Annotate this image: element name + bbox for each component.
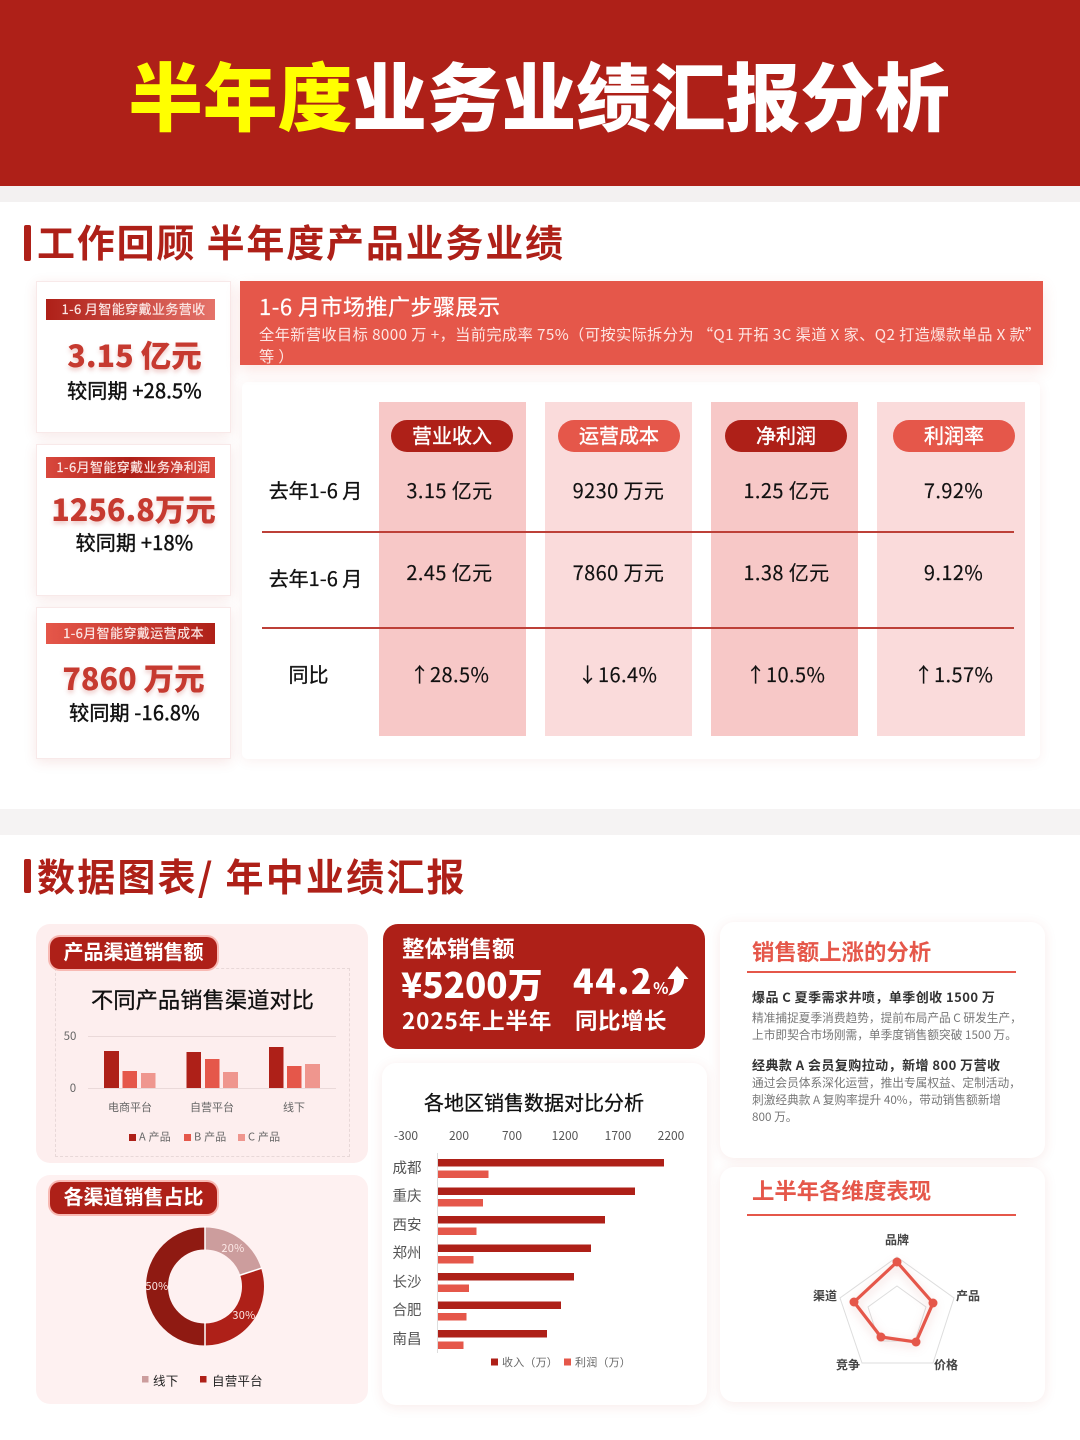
- section heading: 数据图表: [24, 847, 467, 902]
- value: ↓16.4%: [578, 659, 657, 688]
- horizontal bar chart: 西安: [392, 1214, 422, 1235]
- analysis text 2: 通过会员体系深化运营，推出专属权益、定制活动，: [752, 1074, 1021, 1091]
- value: 2.45 亿元: [406, 557, 493, 586]
- grouped bar chart: [64, 1028, 336, 1144]
- panel: comparison table: [242, 382, 1040, 759]
- analysis point 1: 爆品 C 夏季需求井喷，单季创收 1500 万: [752, 987, 995, 1006]
- grouped bar chart: B 产品: [194, 1128, 226, 1144]
- grouped bar chart: 自营平台: [190, 1099, 234, 1115]
- radar chart: [813, 1231, 980, 1373]
- radar chart: 价格: [934, 1356, 958, 1373]
- value: 7860 万元: [573, 557, 664, 586]
- horizontal bar chart: 收入（万）: [502, 1354, 558, 1370]
- horizontal bar chart: 重庆: [392, 1185, 422, 1206]
- grouped bar chart: 线下: [283, 1099, 305, 1115]
- panel: 上半年各维度表现: [720, 1167, 1045, 1402]
- analysis text 1: 精准捕捉夏季消费趋势，提前布局产品 C 研发生产，: [752, 1009, 1022, 1026]
- value: ↑10.5%: [746, 659, 825, 688]
- column: 营业收入: [379, 402, 526, 736]
- value: 1.25 亿元: [743, 475, 830, 504]
- column pill: 运营成本: [579, 420, 659, 449]
- radar chart: 渠道: [813, 1287, 837, 1304]
- panel heading: 销售额上涨的分析: [752, 935, 931, 967]
- horizontal bar chart: 200: [449, 1127, 469, 1144]
- panel: 各渠道销售占比: [36, 1175, 368, 1404]
- value: 1.38 亿元: [743, 557, 830, 586]
- panel: 产品渠道销售额: [36, 924, 368, 1163]
- panel: 销售额上涨的分析: 上市即契合市场刚需，单季度销售额突破 1500 万。: [752, 1026, 1017, 1043]
- KPI label: 1-6月智能穿戴业务净利润: [56, 457, 211, 476]
- horizontal bar chart: 1700: [605, 1127, 632, 1144]
- horizontal bar chart: -300: [394, 1127, 418, 1144]
- heading accent bar: [24, 859, 31, 893]
- banner text: [259, 323, 1041, 365]
- stat: growth: 44.2%: [573, 955, 668, 1004]
- heading text: 数据图表/ 年中业绩汇报: [37, 847, 467, 902]
- KPI comparison: 较同期 +18%: [76, 527, 193, 556]
- analysis text 2: [752, 1074, 1021, 1125]
- KPI label: 1-6 月智能穿戴业务营收: [61, 299, 206, 318]
- dashed chart frame: [55, 968, 350, 1157]
- KPI value: 7860 万元: [62, 655, 205, 699]
- header banner: [0, 0, 1080, 186]
- KPI value: 3.15 亿元: [67, 332, 202, 376]
- horizontal bar chart: 2200: [658, 1127, 685, 1144]
- column: 利润率: [877, 402, 1025, 736]
- column: 运营成本: [545, 402, 692, 736]
- horizontal bar chart: 1200: [552, 1127, 579, 1144]
- grouped bar chart: 电商平台: [108, 1099, 152, 1115]
- radar chart: 竞争: [836, 1356, 860, 1373]
- heading text: 工作回顾 半年度产品业务业绩: [37, 213, 565, 268]
- stat: total sales: ¥5200万: [401, 958, 543, 1009]
- banner text: 全年新营收目标 8000 万 +，当前完成率 75%（可按实际拆分为 “Q1 开拓 3C 渠道 X 家、Q2 打造爆款单品 X 款”: [259, 323, 1041, 345]
- heading accent bar: [24, 225, 31, 261]
- column pill: 利润率: [924, 420, 984, 449]
- donut chart: 50%: [145, 1278, 169, 1294]
- panel: 销售额上涨的分析: 刺激经典款 A 复购率提升 40%，带动销售额新增: [752, 1091, 1001, 1108]
- section heading: 工作回顾: [24, 213, 565, 268]
- column pill: [391, 420, 513, 452]
- horizontal bar chart: 700: [502, 1127, 522, 1144]
- row label: 去年1-6 月: [269, 563, 362, 592]
- grouped bar chart: 0: [70, 1080, 76, 1096]
- banner: 市场推广步骤: [240, 281, 1043, 365]
- panel tag: 各渠道销售占比: [64, 1181, 204, 1210]
- chart title: 不同产品销售渠道对比: [91, 983, 314, 1015]
- analysis text 1: [752, 1009, 1022, 1043]
- KPI label: 1-6月智能穿戴运营成本: [63, 623, 204, 642]
- column pill: [725, 420, 847, 452]
- horizontal bar chart: 成都: [392, 1157, 422, 1178]
- horizontal bar chart: 合肥: [392, 1299, 422, 1320]
- icon: up arrow: [668, 966, 688, 996]
- horizontal bar chart: [392, 1127, 685, 1370]
- value: ↑28.5%: [410, 659, 489, 688]
- KPI card: 净利润: [36, 444, 231, 596]
- KPI comparison: 较同期 +28.5%: [67, 375, 202, 404]
- panel: 各地区销售数据: [382, 1063, 707, 1405]
- horizontal bar chart: 长沙: [392, 1271, 422, 1292]
- KPI card: 营收: [36, 281, 231, 433]
- column pill: 净利润: [756, 420, 816, 449]
- donut chart: [142, 1226, 264, 1390]
- column pill: [558, 420, 680, 452]
- panel tag: 产品渠道销售额: [64, 936, 204, 965]
- panel heading: 上半年各维度表现: [752, 1174, 931, 1206]
- KPI value: 1256.8万元: [51, 486, 216, 530]
- KPI comparison: 较同期 -16.8%: [69, 697, 200, 726]
- value: 7.92%: [924, 475, 983, 504]
- column pill: [893, 420, 1015, 452]
- grouped bar chart: C 产品: [248, 1128, 280, 1144]
- row label: 同比: [288, 659, 328, 688]
- radar chart: 品牌: [885, 1231, 909, 1248]
- chart title: 各地区销售数据对比分析: [424, 1087, 644, 1116]
- radar chart: 产品: [956, 1287, 980, 1304]
- horizontal bar chart: 南昌: [392, 1328, 422, 1349]
- stat caption: 2025年上半年: [402, 1004, 552, 1036]
- value: 9.12%: [924, 557, 983, 586]
- value: 3.15 亿元: [406, 475, 493, 504]
- stat caption: 同比增长: [575, 1004, 667, 1036]
- horizontal bar chart: 利润（万）: [575, 1354, 631, 1370]
- row label: 去年1-6 月: [269, 475, 362, 504]
- panel: 整体销售额: [383, 924, 705, 1049]
- grouped bar chart: A 产品: [139, 1128, 171, 1144]
- banner heading: 1-6 月市场推广步骤展示: [259, 290, 500, 322]
- analysis point 2: 经典款 A 会员复购拉动，新增 800 万营收: [752, 1055, 1000, 1074]
- stat heading: 整体销售额: [402, 932, 515, 964]
- donut chart: 20%: [221, 1240, 245, 1256]
- KPI card: 运营成本: [36, 607, 231, 759]
- donut chart: 自营平台: [212, 1370, 263, 1390]
- donut chart: 线下: [153, 1370, 178, 1390]
- value: 9230 万元: [573, 475, 664, 504]
- title: 半年度业务业绩汇报分析: [128, 38, 950, 147]
- donut chart: 30%: [232, 1307, 256, 1323]
- column pill: 营业收入: [412, 420, 492, 449]
- value: ↑1.57%: [914, 659, 993, 688]
- column: 净利润: [711, 402, 858, 736]
- horizontal bar chart: 郑州: [392, 1242, 422, 1263]
- panel: 销售额上涨的分析: [720, 922, 1045, 1158]
- grouped bar chart: 50: [64, 1028, 76, 1044]
- panel: 销售额上涨的分析: 800 万。: [752, 1108, 797, 1125]
